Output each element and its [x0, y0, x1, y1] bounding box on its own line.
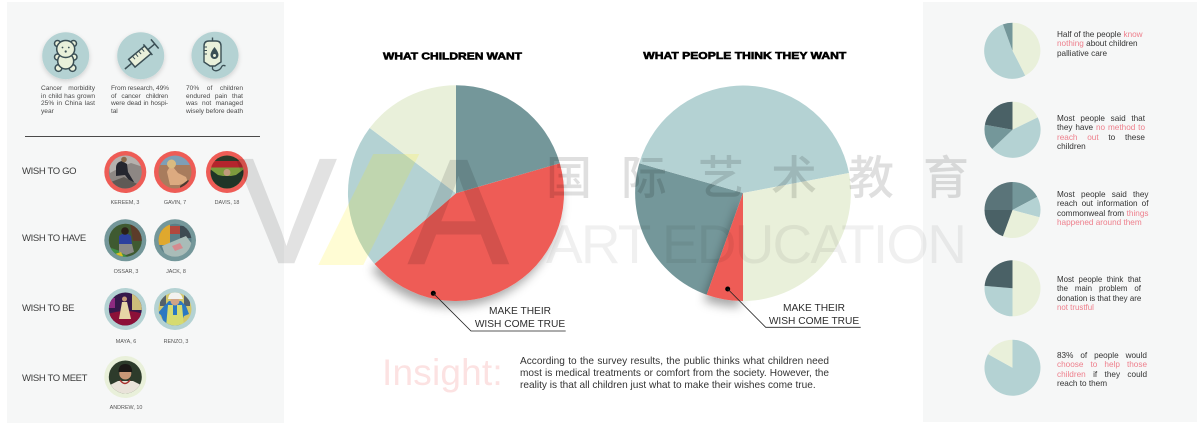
note: choose to help: children if they could [1057, 370, 1147, 379]
watermark: VIA Art Education: 国际艺术教育 [546, 142, 969, 208]
note: no method: children [1057, 142, 1086, 151]
note: know nothing: Half of the people know [1057, 30, 1143, 39]
slice: make their wish come true, red [707, 193, 743, 301]
callout label: people pie: WISH COME TRUE [769, 316, 859, 327]
small pie: not trustful [984, 260, 1041, 316]
watermark: VIA Art Education: V [237, 129, 336, 294]
icon: IV drip bag [192, 32, 238, 79]
pie chart: what children want [348, 85, 564, 301]
note: choose to help: choose to help those [1057, 360, 1147, 369]
stat text: pain not managed: 70% of children [186, 85, 243, 92]
watermark: VIA Art Education: ART EDUCATION [546, 213, 967, 275]
note: around them [1057, 190, 1149, 227]
stat text: pain not managed: endured pain that [186, 93, 243, 100]
name: Gavin: GAVIN, 7 [164, 200, 186, 206]
note: no method [1057, 114, 1145, 151]
note: no method: Most people said that [1057, 114, 1145, 123]
panel: left background [7, 2, 284, 423]
name: Ossar: OSSAR, 3 [114, 269, 138, 275]
small pie: no method [984, 102, 1041, 158]
stat text: pain not managed: was not managed [186, 100, 243, 107]
callout leader: people pie [725, 286, 861, 327]
note: not trustful: the main problem of [1057, 284, 1141, 293]
portrait: Ossar [104, 219, 146, 261]
stat text: cancer morbidity: in child has grown [41, 93, 95, 100]
callout label: people pie [768, 303, 859, 327]
name: Davis: DAVIS, 18 [215, 200, 239, 206]
stat text: dead in hospital: tal [111, 108, 118, 115]
note: around them: reach out information of [1057, 199, 1148, 208]
stat text: cancer morbidity: year [41, 108, 54, 115]
note: choose to help: 83% of people would [1057, 351, 1147, 360]
callout label: people pie: MAKE THEIR [783, 303, 845, 314]
stat text: cancer morbidity [41, 85, 95, 115]
stat text: pain not managed: wisely before death [186, 108, 243, 115]
note: around them: Most people said they [1057, 190, 1148, 199]
callout leader: children pie [431, 291, 566, 331]
portrait: Gavin [154, 151, 196, 193]
portrait: Kereem [104, 151, 146, 193]
note: no method: they have no method to [1057, 123, 1145, 132]
name: Kereem: KEREEM, 3 [111, 200, 139, 206]
note: not trustful: donation is that they are [1057, 294, 1141, 303]
chart title: what people think they want: WHAT PEOPLE THINK THEY WANT [643, 50, 847, 62]
stat text: cancer morbidity: Cancer morbidity [41, 85, 95, 92]
note: choose to help [1057, 351, 1147, 388]
graphics layer: charts, icons and portraits [40, 22, 1041, 398]
divider [25, 136, 260, 137]
heading: wish to meet: WISH TO MEET [22, 372, 87, 384]
insight body text [520, 356, 829, 391]
note: know nothing: palliative care [1057, 49, 1107, 58]
watermark: VIA Art Education: A [409, 130, 508, 295]
name: Renzo: RENZO, 3 [164, 339, 188, 345]
portrait: Jack [154, 219, 196, 261]
insight body text: most is medical treatments or comfort from the society. However, the [520, 368, 829, 379]
note: no method: reach out to these [1057, 133, 1145, 142]
name: Maya: MAYA, 6 [116, 339, 136, 345]
callout label: children pie: MAKE THEIR [489, 306, 551, 317]
callout label: children pie [474, 306, 565, 330]
portrait: Davis [206, 151, 248, 193]
panel: right background [923, 2, 1197, 422]
note: not trustful: not trustful [1057, 303, 1094, 312]
heading: wish to be: WISH TO BE [22, 302, 74, 314]
note: around them: happened around them [1057, 218, 1142, 227]
name: Jack: JACK, 8 [166, 269, 186, 275]
insight body text: reality is that all children just what to make their wishes come true. [520, 380, 816, 391]
stat text: dead in hospital [111, 85, 169, 115]
heading: wish to have: WISH TO HAVE [22, 233, 86, 244]
slice: make their wish come true, red [374, 163, 564, 301]
portrait: Andrew [104, 356, 146, 398]
note: not trustful: Most people think that [1057, 275, 1141, 284]
stat text: pain not managed [186, 85, 243, 115]
icon: teddy bear [42, 32, 89, 79]
chart title: what children want: WHAT CHILDREN WANT [383, 50, 523, 62]
stat text: cancer morbidity: 25% in China last [41, 100, 95, 107]
portrait: Maya [104, 288, 146, 330]
pie chart: what people think they want [635, 86, 851, 301]
icon: syringe [117, 32, 164, 79]
insight body text: According to the survey results, the public thinks what children need [520, 356, 829, 367]
stat text: dead in hospital: were dead in hospi- [111, 100, 168, 107]
note: not trustful [1057, 275, 1141, 312]
portrait: Renzo [154, 288, 196, 330]
note: choose to help: reach to them [1057, 379, 1107, 388]
small pie: choose to help [984, 340, 1040, 396]
callout label: children pie: WISH COME TRUE [475, 319, 565, 330]
stat text: dead in hospital: of cancer children [111, 93, 168, 100]
heading: wish to go: WISH TO GO [22, 166, 76, 177]
note: around them: commonweal from things [1057, 209, 1148, 218]
note: know nothing [1057, 30, 1143, 58]
name: Andrew: ANDREW, 10 [110, 405, 142, 411]
small pie: around them [984, 182, 1040, 238]
note: know nothing: nothing about children [1057, 39, 1138, 48]
small pie: know nothing [984, 23, 1040, 79]
insight heading: Insight: [382, 352, 503, 393]
stat text: dead in hospital: From research, 49% [111, 85, 169, 92]
